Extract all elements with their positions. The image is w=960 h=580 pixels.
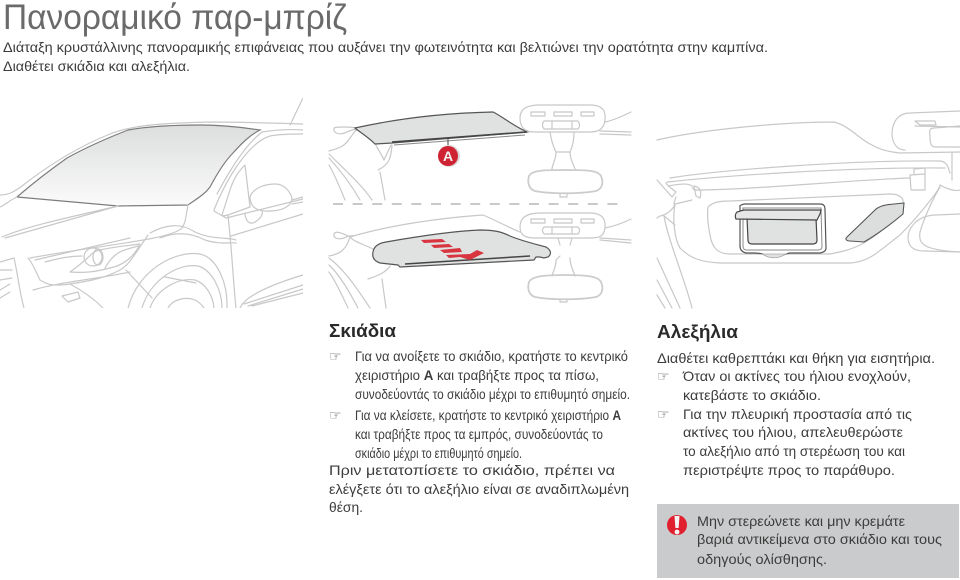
red arrow	[421, 239, 484, 260]
callout: warning	[657, 504, 959, 578]
warning text: Μην στερεώνετε και μην κρεμάτε	[697, 513, 905, 529]
heading: Σκιάδια: Σκιάδια	[329, 320, 397, 341]
warning text: βαριά αντικείμενα στο σκιάδιο και τους	[697, 531, 942, 547]
door sill	[240, 275, 303, 308]
upper view: visor closed up with label A	[329, 105, 631, 200]
vanity mirror	[740, 204, 826, 257]
bumper and lower details	[33, 272, 130, 290]
warning text: οδηγούς ολίσθησης.	[697, 551, 827, 567]
bullet list: ☞	[329, 349, 342, 365]
bullet list	[657, 368, 912, 478]
intro text	[3, 39, 768, 74]
lower view: visor folded down with arrow	[329, 213, 631, 308]
panel: side visors instructions	[657, 321, 935, 478]
illustration: side sun visor with vanity mirror	[657, 111, 960, 308]
warning text	[697, 513, 942, 567]
console and mirror	[520, 105, 605, 132]
illustration: car with panoramic windscreen	[0, 98, 303, 308]
visor panel	[355, 112, 527, 144]
visor panel	[373, 230, 550, 267]
bullet list: σκιάδιο μέχρι το επιθυμητό σημείο.	[355, 445, 522, 461]
bullet list: ☞	[329, 408, 342, 424]
bullet list: χειριστήριο A και τραβήξτε προς τα πίσω,	[355, 367, 599, 383]
note text: θέση.	[329, 499, 363, 515]
bullet list: Για να ανοίξετε το σκιάδιο, κρατήστε το κεντρικό	[355, 348, 628, 364]
bullet list: κατεβάστε το σκιάδιο.	[683, 387, 821, 403]
headlight	[70, 244, 140, 272]
note text: ελέγξετε ότι το αλεξήλιο είναι σε αναδιπλωμένη	[329, 481, 629, 497]
callout A	[438, 139, 460, 167]
dashed divider	[333, 203, 625, 205]
bonnet shut line	[150, 226, 236, 240]
icon: warning	[667, 515, 687, 535]
intro line: Διαθέτει καθρεπτάκι και θήκη για εισητήρια.	[657, 350, 935, 366]
callout A: A	[443, 148, 453, 164]
intro text: Διάταξη κρυστάλλινης πανοραμικής επιφάνειας που αυξάνει την φωτεινότητα και βελτιώνει την ορατότητα στην καμπίνα.	[3, 39, 768, 55]
bullet list: Για την πλευρική προστασία από τις	[683, 406, 912, 422]
door and a-pillar	[217, 130, 303, 194]
intro text: Διαθέτει σκιάδια και αλεξήλια.	[3, 58, 190, 74]
ticket holder	[846, 203, 904, 242]
wheel arch and wheel	[128, 253, 227, 308]
illustration: central sun visor, open and closed	[329, 105, 631, 308]
bullet list	[329, 348, 630, 461]
windscreen	[17, 125, 260, 206]
bullet list: περιστρέψτε προς το παράθυρο.	[683, 462, 895, 478]
panel: sun visors instructions	[329, 320, 630, 515]
door mirror	[250, 184, 292, 211]
note text	[329, 462, 629, 515]
bullet list: Όταν οι ακτίνες του ήλιου ενοχλούν,	[682, 368, 911, 384]
bullet list: το αλεξήλιο από τη στερέωση του και	[683, 443, 905, 459]
bullet list: ☞	[657, 369, 670, 385]
bullet list: συνοδεύοντάς το σκιάδιο μέχρι το επιθυμητό σημείο.	[355, 386, 630, 402]
bullet list: ☞	[657, 407, 670, 423]
heading: Αλεξήλια: Αλεξήλια	[657, 321, 739, 343]
note text: Πριν μετατοπίσετε το σκιάδιο, πρέπει να	[329, 462, 615, 478]
bullet list: ακτίνες του ήλιου, απελευθερώστε	[683, 424, 903, 440]
bullet list: και τραβήξτε προς τα εμπρός, συνοδεύοντάς το	[355, 426, 603, 442]
bullet list: Για να κλείσετε, κρατήστε το κεντρικό χειριστήριο A	[355, 407, 621, 423]
console and mirror	[520, 213, 605, 238]
